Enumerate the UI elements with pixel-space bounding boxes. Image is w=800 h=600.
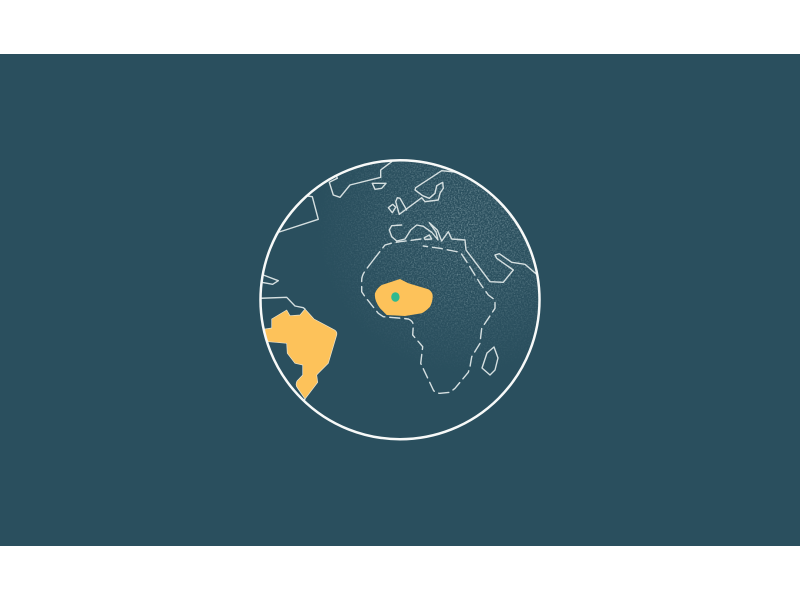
outline: Ireland xyxy=(388,204,396,213)
land outlines xyxy=(260,162,537,403)
globe ring xyxy=(260,160,540,439)
outline: Arctic island xyxy=(372,183,386,189)
outline: Greenland and Canada xyxy=(329,162,392,197)
outline: North America xyxy=(279,196,318,232)
globe xyxy=(260,160,540,440)
outline: Britain and Scandinavia xyxy=(396,171,455,214)
outline: Central America xyxy=(260,297,305,309)
outline: Africa dashed xyxy=(362,239,495,393)
outline: Caribbean island xyxy=(262,275,278,284)
speckled shading xyxy=(333,162,538,356)
location marker xyxy=(391,292,400,302)
country highlight: Brazil xyxy=(260,309,337,399)
outline: Sicily xyxy=(424,235,432,240)
outline: southern Europe and Arabia xyxy=(389,223,537,282)
country highlight: Niger region xyxy=(375,279,433,316)
outline: southern Brazil border xyxy=(304,398,306,400)
outline: Madagascar xyxy=(482,347,498,375)
